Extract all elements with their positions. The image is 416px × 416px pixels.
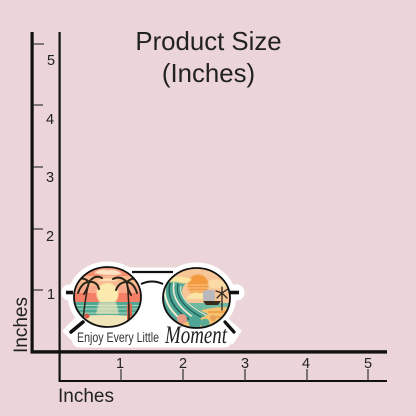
horizontal ruler: 3 (241, 356, 249, 372)
palm trees (75, 277, 141, 321)
glasses frame (66, 267, 239, 332)
horizontal ruler: 4 (302, 356, 310, 372)
axis label: vertical inches: Inches (11, 297, 32, 353)
horizontal ruler: 2 (179, 356, 187, 372)
vertical ruler (30, 32, 61, 381)
horizontal ruler: 1 (116, 356, 124, 372)
small palm (216, 287, 228, 310)
horizontal ruler (30, 350, 387, 382)
title: Product Size (135, 28, 282, 56)
vertical ruler: 3 (46, 170, 54, 186)
axis label: horizontal inches: Inches (58, 386, 114, 407)
vertical ruler: 1 (47, 287, 55, 303)
horizontal ruler: 5 (364, 356, 372, 372)
left lens: beach sunset (74, 268, 140, 326)
vertical ruler: 2 (46, 229, 54, 245)
right lens: wave and sun (164, 268, 230, 328)
sticker: sunglasses: Moment (164, 322, 228, 349)
title (135, 28, 282, 88)
sticker caption: Enjoy Every Little (77, 329, 159, 345)
flowers and plants (177, 314, 187, 324)
vertical ruler: 4 (46, 112, 54, 128)
wave (160, 276, 208, 322)
sticker: sunglasses (62, 262, 244, 349)
vertical ruler: 5 (47, 53, 55, 69)
title: (Inches) (162, 60, 255, 88)
sticker white backing (62, 262, 244, 347)
